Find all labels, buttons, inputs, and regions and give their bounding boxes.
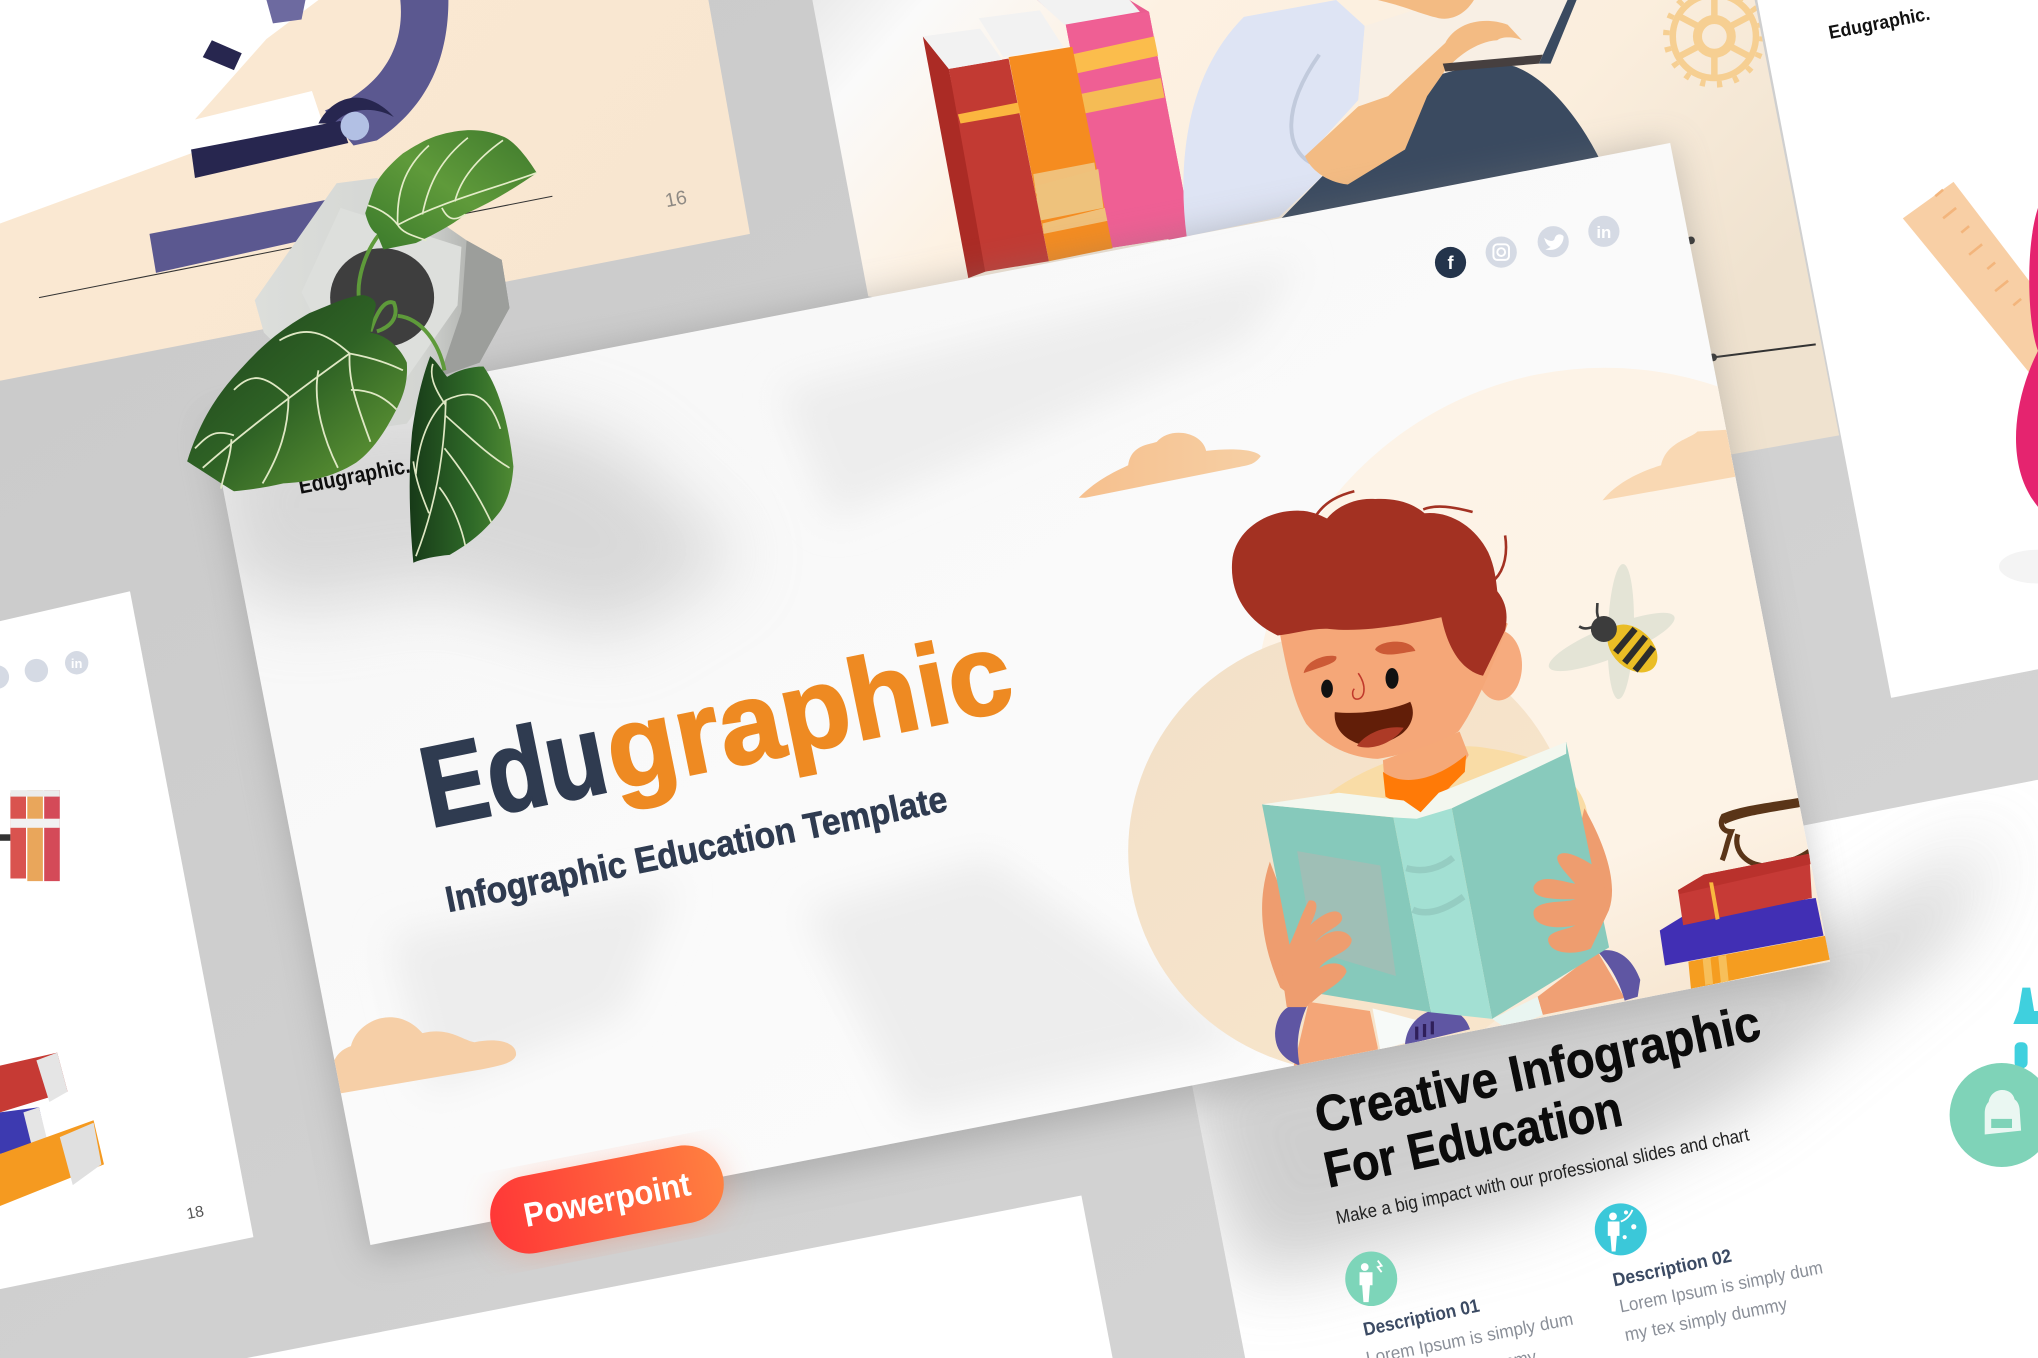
shirt [1383, 755, 1466, 816]
logo text top right: Edugraphic. [1827, 3, 1932, 43]
text block: description 02: Lorem Ipsum is simply dum [1618, 1257, 1824, 1316]
arms [1262, 808, 1612, 1007]
icon: description 02 [1595, 1203, 1647, 1255]
plant shadow [208, 390, 741, 637]
left leg [1293, 1002, 1378, 1068]
heading: For Education [1319, 1080, 1627, 1199]
panel: bottom-right slide [1157, 767, 2038, 1358]
plant stems [359, 234, 445, 370]
subtitle: Make a big impact with our professional slides and chart [1334, 1123, 1752, 1228]
icon: stacked books [0, 1053, 104, 1206]
icon: books [923, 0, 1192, 278]
icon: facebook [1435, 247, 1466, 278]
text block: description 02: my tex simply dummy [1623, 1294, 1790, 1345]
text block: description 02 [1611, 1245, 1824, 1345]
panel: top-centre slide with books and person [806, 0, 1846, 468]
main slide shadow [211, 143, 1830, 1258]
text block: description 01: Description 01 [1361, 1295, 1481, 1340]
panel: bottom-centre slide [247, 1196, 1113, 1358]
icon: bee [1543, 564, 1680, 700]
icon: pink shape [2016, 208, 2038, 507]
icon: instagram [1486, 237, 1517, 268]
leaf right [410, 356, 513, 563]
icon: twitter [1538, 226, 1569, 257]
jacket [1326, 746, 1609, 910]
eyes [1321, 668, 1399, 698]
shoe [1405, 1009, 1470, 1045]
page number 16: 16 [663, 186, 689, 212]
cloud centre [1079, 433, 1261, 498]
icon: gear [1666, 0, 1762, 84]
plant [187, 130, 537, 563]
plant pot [255, 178, 510, 430]
icon: linkedin [1588, 216, 1619, 247]
neck [1383, 732, 1469, 811]
icon: facebook: f [1447, 253, 1454, 273]
cloud right [1603, 429, 1742, 500]
icon: backpack badge [1950, 1063, 2038, 1167]
eyebrows [1304, 656, 1336, 673]
panel: top-left slide with microscope [0, 0, 780, 390]
sock left [1373, 1008, 1417, 1050]
palm shadows [390, 260, 1300, 1118]
subtitle: Infographic Education Template [442, 778, 951, 920]
leaf left [187, 295, 407, 491]
panel: right slide with ruler [1742, 0, 2038, 702]
icon: person with laptop [1183, 0, 1601, 237]
icon: test tubes [0, 790, 60, 881]
social icons left slide [0, 651, 88, 689]
logo text: Edugraphic. [296, 453, 412, 499]
button shadow [495, 1148, 724, 1254]
title: Edu [410, 690, 617, 852]
beige circle backdrop [1128, 630, 1575, 1072]
cream circle backdrop [1262, 368, 1830, 1034]
hair strands [1317, 491, 1506, 580]
button: Powerpoint: Powerpoint [521, 1165, 694, 1235]
heading [1316, 1008, 1760, 1188]
right leg [1538, 951, 1625, 1015]
text block: description 02: Description 02 [1611, 1245, 1733, 1290]
heading: Creative Infographic [1310, 994, 1765, 1144]
mouth [1335, 702, 1413, 745]
button: Powerpoint [483, 1139, 731, 1260]
fingers [1280, 853, 1609, 1007]
icon: book stack [1660, 854, 1833, 989]
icon: linkedin: in [1596, 223, 1611, 242]
illustration: boy reading [1232, 491, 1640, 1068]
icon: description 01 [1345, 1251, 1397, 1306]
leaf top [365, 130, 537, 250]
nose [1353, 673, 1364, 699]
hair [1232, 499, 1507, 676]
social icons left slide: in [71, 656, 83, 671]
ear [1475, 630, 1522, 700]
panel: main slide [222, 143, 1830, 1245]
panel: left slide [0, 585, 260, 1300]
cloud bottom-left [332, 1017, 516, 1094]
icon: flask [2013, 988, 2038, 1068]
page number 18: 18 [185, 1203, 205, 1223]
face [1280, 572, 1508, 759]
book [1262, 742, 1609, 1019]
icon: glasses [1721, 801, 1809, 866]
title: graphic [594, 607, 1022, 815]
icon: ruler [1903, 182, 2038, 383]
title [410, 607, 1022, 852]
